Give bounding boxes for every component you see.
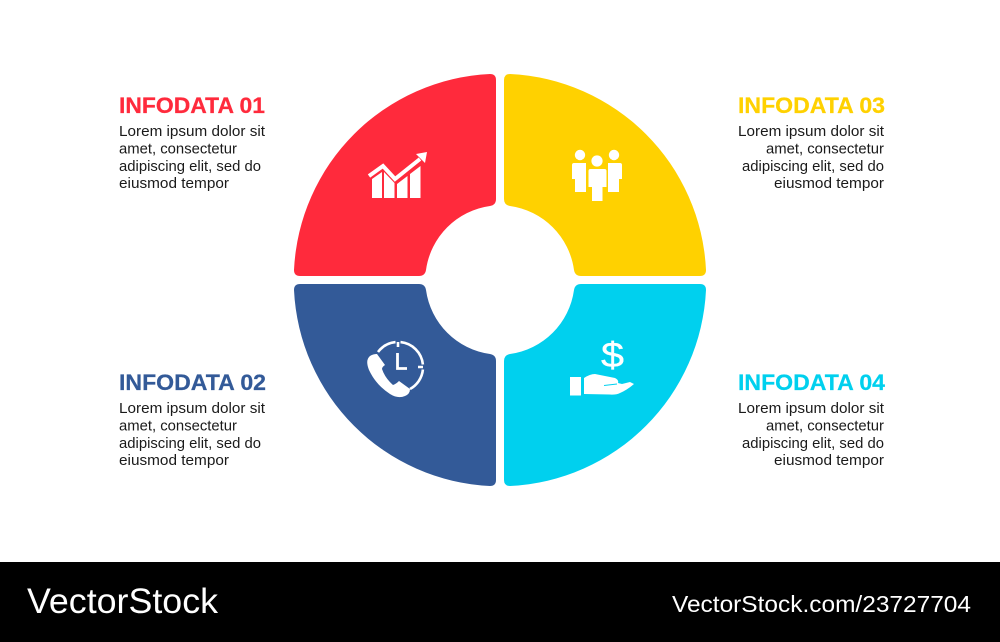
- text block: infodata 03: [738, 93, 885, 192]
- text block: infodata 01: adipiscing elit, sed do: [119, 159, 261, 175]
- text block: infodata 03: adipiscing elit, sed do: [742, 159, 884, 175]
- text block: infodata 03: Lorem ipsum dolor sit: [738, 124, 884, 140]
- text block: infodata 02: eiusmod tempor: [119, 453, 229, 469]
- text block: infodata 02: Lorem ipsum dolor sit: [119, 401, 265, 417]
- text block: infodata 01: [119, 93, 265, 192]
- text block: infodata 02: amet, consectetur: [119, 418, 237, 434]
- text block: infodata 03: eiusmod tempor: [774, 176, 884, 192]
- text block: infodata 04: amet, consectetur: [766, 418, 884, 434]
- icon: hand with dollar: $: [601, 335, 624, 375]
- text block: infodata 01: INFODATA 01: [119, 93, 265, 118]
- text block: infodata 03: INFODATA 03: [738, 93, 885, 118]
- text block: infodata 01: eiusmod tempor: [119, 176, 229, 192]
- text block: infodata 04: [738, 370, 885, 469]
- text block: infodata 04: INFODATA 04: [738, 370, 885, 395]
- text block: infodata 04: Lorem ipsum dolor sit: [738, 401, 884, 417]
- segment: yellow quarter: [504, 74, 706, 276]
- icon: phone and clock: [367, 342, 423, 397]
- footer url: VectorStock.com/23727704: [672, 591, 971, 617]
- text block: infodata 03: amet, consectetur: [766, 142, 884, 158]
- segment: cyan quarter: [504, 284, 706, 486]
- text block: infodata 02: adipiscing elit, sed do: [119, 436, 261, 452]
- icon: team of people: [572, 150, 622, 201]
- icon: hand with dollar: [570, 335, 634, 396]
- text block: infodata 04: adipiscing elit, sed do: [742, 436, 884, 452]
- segment: blue quarter: [294, 284, 496, 486]
- text block: infodata 02: INFODATA 02: [119, 370, 266, 395]
- text block: infodata 01: Lorem ipsum dolor sit: [119, 124, 265, 140]
- segment: red quarter: [294, 74, 496, 276]
- footer bar: [0, 562, 1000, 642]
- footer logo text: VectorStock: [27, 582, 219, 621]
- text block: infodata 04: eiusmod tempor: [774, 453, 884, 469]
- icon: growth chart: [369, 152, 427, 198]
- text block: infodata 01: amet, consectetur: [119, 142, 237, 158]
- text block: infodata 02: [119, 370, 266, 469]
